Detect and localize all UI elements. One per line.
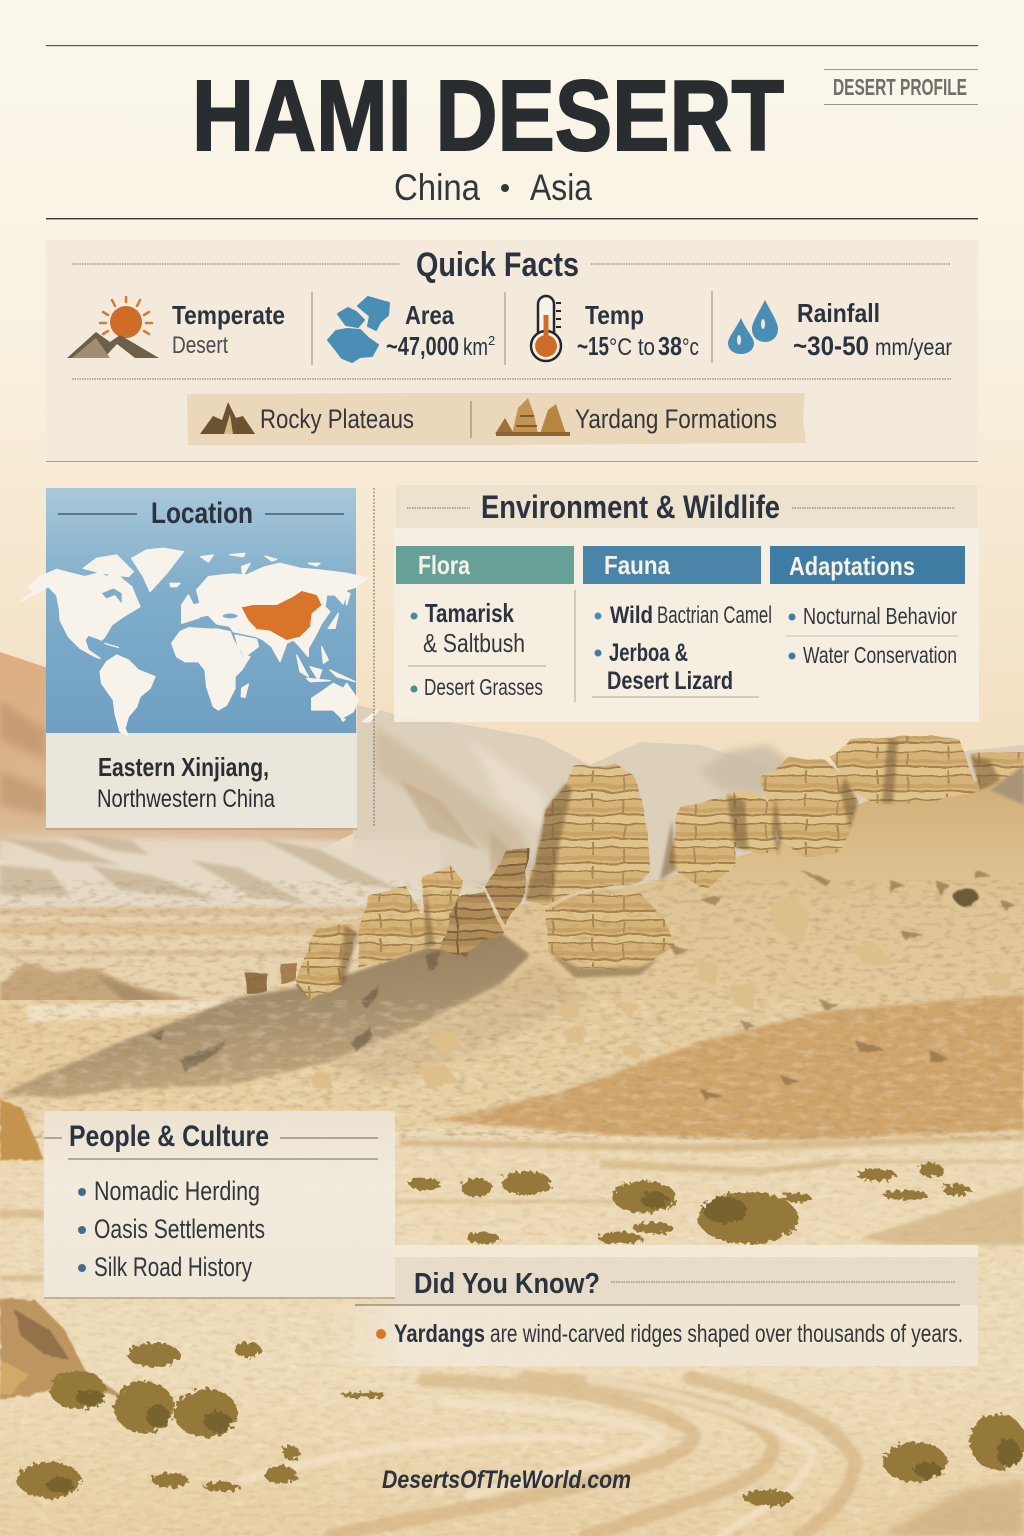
fact: rainfall: ~30-50 bbox=[793, 331, 869, 361]
fact: area: Area bbox=[405, 300, 454, 330]
icon: sun and mountains bbox=[67, 297, 159, 358]
column: fauna: Fauna bbox=[604, 550, 670, 580]
icon: yardang formations bbox=[495, 398, 570, 436]
fact: rainfall: mm/year bbox=[875, 334, 952, 360]
label: rocky plateaus: Rocky Plateaus bbox=[260, 404, 414, 434]
column: fauna: Desert Lizard bbox=[607, 667, 733, 695]
fact: area bbox=[386, 300, 495, 361]
ground bands bbox=[0, 1134, 1024, 1281]
location caption: Eastern Xinjiang, bbox=[98, 752, 269, 782]
fact: rainfall bbox=[793, 298, 952, 361]
bushes bbox=[17, 1163, 1024, 1506]
icon: rain drops bbox=[728, 300, 778, 354]
subtitle: Asia bbox=[530, 167, 592, 208]
china highlight bbox=[242, 591, 322, 640]
sunlit slope bbox=[0, 775, 1024, 1130]
panel: people and culture bbox=[44, 1111, 395, 1299]
fact: temperature: Temp bbox=[585, 300, 644, 330]
flats bbox=[0, 905, 520, 1120]
label: yardang formations: Yardang Formations bbox=[575, 404, 777, 434]
top rule bbox=[46, 45, 978, 46]
column: flora: Desert Grasses bbox=[424, 674, 543, 700]
world map bbox=[20, 548, 378, 736]
panel: did you know bbox=[330, 1245, 978, 1366]
heading: did you know: Did You Know? bbox=[414, 1268, 600, 1300]
list: culture items bbox=[78, 1176, 265, 1282]
column: flora: Flora bbox=[418, 550, 470, 580]
heading: location: Location bbox=[151, 497, 253, 530]
footer: website: DesertsOfTheWorld.com bbox=[382, 1466, 631, 1494]
fact: area: 2 bbox=[488, 333, 495, 348]
list: culture items: Nomadic Herding bbox=[94, 1176, 260, 1206]
fact: rainfall: Rainfall bbox=[797, 298, 880, 328]
fact: area: ~47,000 bbox=[386, 331, 459, 361]
fact: temperature: 38 bbox=[658, 331, 682, 361]
location caption bbox=[97, 752, 275, 813]
fact: temperate desert: Temperate bbox=[172, 300, 285, 330]
fact: area: km bbox=[463, 334, 488, 361]
panel: environment and wildlife bbox=[394, 485, 979, 722]
list: culture items: Silk Road History bbox=[94, 1252, 252, 1282]
title: HAMI DESERT bbox=[192, 60, 784, 172]
fact: yardangs: Yardangs bbox=[394, 1320, 485, 1348]
tag strip: landforms bbox=[187, 393, 806, 445]
column: adaptations: Water Conservation bbox=[803, 642, 957, 668]
subtitle: China bbox=[394, 167, 480, 208]
column: flora: & Saltbush bbox=[423, 628, 525, 658]
rock shadows bbox=[338, 738, 1000, 985]
column: fauna: Jerboa & bbox=[609, 639, 688, 667]
texture bbox=[0, 880, 1024, 1140]
location caption: Northwestern China bbox=[97, 785, 275, 813]
icon: thermometer bbox=[531, 296, 561, 361]
heading: people and culture: People & Culture bbox=[69, 1120, 269, 1153]
column: fauna bbox=[583, 546, 772, 697]
fact: temperature bbox=[577, 300, 699, 361]
fact: temperature: °c bbox=[682, 334, 699, 361]
lower right hill bbox=[440, 995, 1024, 1140]
fact: temperate desert: Desert bbox=[172, 332, 228, 359]
column: flora: Tamarisk bbox=[425, 598, 514, 628]
column: adaptations: Nocturnal Behavior bbox=[803, 603, 957, 629]
list: culture items: Oasis Settlements bbox=[94, 1214, 265, 1244]
heading: environment and wildlife: Environment & Wildlife bbox=[481, 489, 780, 525]
panel: quick facts bbox=[46, 240, 978, 462]
panel: location bbox=[20, 488, 378, 830]
dirt track bbox=[240, 1378, 855, 1536]
icon: area map bbox=[328, 297, 389, 362]
fact: temperature: °C to bbox=[609, 334, 655, 361]
icon: rocky plateaus bbox=[200, 402, 255, 434]
foreground sand bbox=[0, 1110, 1024, 1536]
column: adaptations bbox=[770, 546, 965, 668]
heading: quick facts: Quick Facts bbox=[416, 246, 579, 284]
bottom header rule bbox=[46, 218, 978, 219]
far mountains bbox=[0, 652, 1024, 930]
fact: temperature: ~15 bbox=[577, 331, 609, 361]
bottom left outcrop bbox=[0, 1298, 125, 1400]
fact: temperate desert bbox=[172, 300, 285, 359]
column: fauna: Wild bbox=[610, 602, 653, 629]
subtitle bbox=[394, 167, 592, 208]
column: adaptations: Adaptations bbox=[789, 551, 915, 581]
column: fauna: Bactrian Camel bbox=[657, 602, 772, 629]
rubble rocks bbox=[310, 870, 1015, 1100]
column: flora bbox=[396, 546, 574, 700]
shaded slope bbox=[0, 928, 530, 1098]
rock formations bbox=[245, 735, 1024, 1000]
